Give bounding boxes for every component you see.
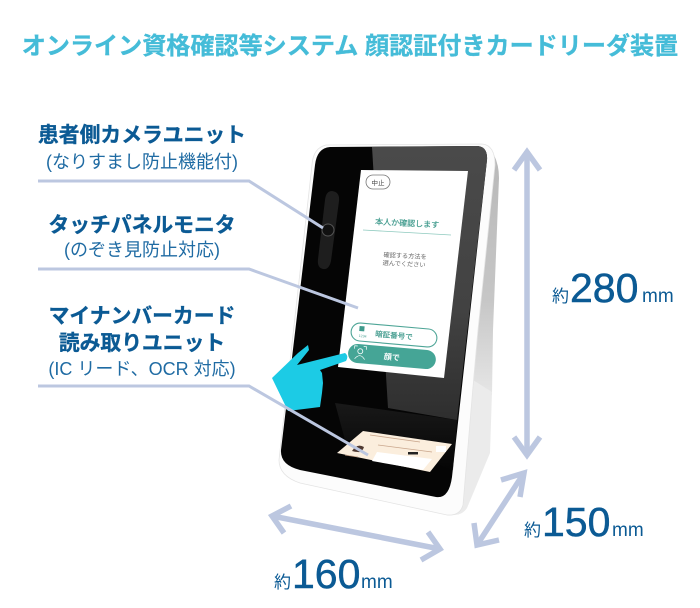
glass reflection bbox=[372, 146, 487, 420]
depth label bbox=[524, 499, 644, 545]
touch screen: 選んでください bbox=[382, 259, 426, 269]
face button: 顔で bbox=[384, 351, 400, 363]
depth label: mm bbox=[612, 520, 644, 541]
label: camera unit: 患者側カメラユニット bbox=[38, 124, 246, 147]
PIN button: 1234 bbox=[359, 334, 367, 339]
label: card reader: 読み取りユニット bbox=[59, 332, 225, 355]
width label bbox=[274, 551, 393, 597]
leader lines bbox=[38, 181, 368, 455]
label: camera unit bbox=[38, 124, 246, 172]
screen heading: 本人か確認します bbox=[375, 216, 439, 230]
device right lower side bbox=[450, 380, 492, 515]
card reader and card bbox=[337, 431, 452, 472]
depth label: 約 bbox=[524, 521, 541, 540]
width label: mm bbox=[361, 572, 393, 593]
label: touch panel bbox=[48, 214, 236, 260]
depth label: 150 bbox=[542, 499, 610, 545]
front glass bbox=[281, 146, 487, 497]
PIN button bbox=[350, 322, 438, 348]
camera unit bbox=[318, 191, 339, 269]
width label: 160 bbox=[292, 551, 360, 597]
touch screen: 中止 bbox=[372, 178, 385, 187]
lower glass shade bbox=[335, 403, 457, 470]
label: card reader bbox=[48, 305, 236, 379]
width arrow bbox=[272, 506, 440, 560]
label: touch panel: (のぞき見防止対応) bbox=[64, 240, 220, 260]
label: camera unit: (なりすまし防止機能付) bbox=[46, 152, 238, 172]
height label: 約 bbox=[552, 287, 569, 306]
title: オンライン資格確認等システム 顔認証付きカードリーダ装置 bbox=[22, 32, 678, 60]
touch screen bbox=[338, 170, 468, 378]
label: touch panel: タッチパネルモニタ bbox=[48, 214, 236, 237]
height label: 280 bbox=[570, 265, 638, 311]
screen message: 確認する方法を bbox=[383, 251, 427, 261]
PIN button: 暗証番号で bbox=[375, 328, 413, 342]
face button bbox=[347, 343, 437, 370]
height label: mm bbox=[642, 286, 674, 307]
height label bbox=[552, 265, 674, 311]
device side bbox=[470, 155, 499, 395]
pointing hand icon bbox=[272, 345, 347, 411]
label: card reader: (IC リード、OCR 対応) bbox=[48, 359, 236, 379]
stop button bbox=[366, 175, 390, 189]
device body bbox=[279, 144, 495, 515]
label: card reader: マイナンバーカード bbox=[49, 305, 235, 328]
device bbox=[279, 144, 499, 515]
depth arrow bbox=[474, 473, 524, 545]
height arrow bbox=[514, 151, 540, 455]
width label: 約 bbox=[274, 573, 291, 592]
